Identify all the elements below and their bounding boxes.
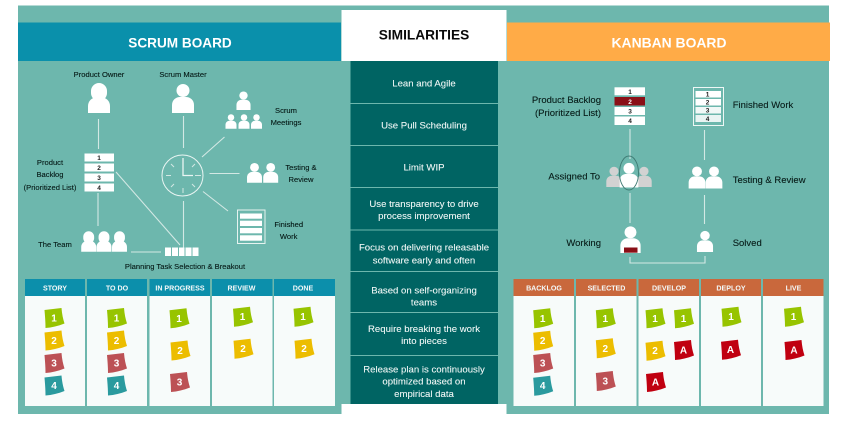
- column: selected: [576, 279, 636, 406]
- label: product backlog: (Prioritized List): [535, 108, 601, 119]
- column: review: 1: [240, 312, 246, 323]
- column: in progress: 2: [177, 346, 183, 357]
- label: finished work: Work: [280, 232, 298, 241]
- label: product owner: Product Owner: [74, 70, 125, 79]
- item: transparency: process improvement: [378, 211, 470, 222]
- column: backlog: 2: [540, 336, 546, 347]
- label: scrum master: Scrum Master: [159, 70, 207, 79]
- column: story: 4: [51, 381, 57, 392]
- label: assigned to: Assigned To: [548, 172, 600, 182]
- icon: planning tasks: [165, 248, 198, 256]
- label: scrum meetings: Scrum: [275, 106, 297, 115]
- item: lean and agile: Lean and Agile: [392, 78, 456, 90]
- column: backlog: BACKLOG: [526, 284, 562, 292]
- heading: kanban board: [507, 22, 830, 61]
- item: transparency: Use transparency to drive: [369, 199, 479, 210]
- heading: scrum board: SCRUM BOARD: [128, 36, 232, 50]
- icon: clock: [162, 155, 203, 196]
- label: solved: Solved: [733, 238, 762, 249]
- item: releasable software: Focus on delivering releasable: [359, 242, 489, 254]
- item: self-organizing teams: teams: [411, 298, 437, 308]
- item: breaking work: into pieces: [401, 336, 447, 347]
- column: deploy: A: [727, 345, 734, 356]
- label: working: Working: [566, 238, 601, 249]
- icon: product backlog list: 4: [97, 185, 101, 192]
- label: the team: The Team: [38, 240, 72, 249]
- column: to do: TO DO: [106, 284, 129, 292]
- column: backlog: 3: [540, 358, 546, 370]
- column: deploy: DEPLOY: [716, 284, 746, 292]
- icon: product backlog list: [84, 154, 114, 192]
- icon: scrum meetings: [226, 91, 262, 129]
- column: story: 1: [51, 314, 57, 324]
- icon: testing and review: [247, 163, 278, 183]
- column: develop: 2: [652, 346, 658, 357]
- label: testing and review: Testing &: [285, 163, 317, 172]
- column: done: 2: [301, 344, 307, 355]
- kanban connector lines: [630, 129, 705, 263]
- icon: solved: [697, 231, 713, 252]
- item: self-organizing teams: Based on self-organizing: [371, 286, 477, 296]
- column: develop: A: [652, 378, 659, 388]
- icon: product backlog list: 1: [97, 155, 101, 162]
- column: develop: [638, 279, 699, 406]
- heading: similarities: [342, 10, 506, 61]
- column: selected: SELECTED: [588, 284, 625, 292]
- icon: kanban backlog list: 4: [628, 118, 632, 125]
- icon: working: [620, 226, 641, 253]
- column: in progress: [150, 279, 210, 406]
- label: planning task selection: Planning Task Selection & Breakout: [125, 262, 246, 271]
- icon: kanban backlog list: 2: [628, 99, 632, 106]
- icon: product backlog list: 2: [97, 165, 101, 172]
- icon: testing and review: [689, 166, 722, 188]
- column: review: REVIEW: [228, 284, 256, 292]
- icon: the team: [81, 231, 127, 252]
- icon: kanban finished work: 2: [706, 100, 710, 106]
- board: scrum columns: [25, 279, 335, 406]
- white footer tab: [342, 404, 506, 414]
- column: live: LIVE: [786, 284, 802, 292]
- icon: product backlog list: 3: [97, 175, 101, 182]
- column: selected: 1: [603, 314, 609, 325]
- heading: similarities: SIMILARITIES: [379, 28, 469, 42]
- icon: kanban finished work: 4: [706, 116, 710, 123]
- column: develop: 1: [681, 314, 687, 325]
- heading: scrum board: [18, 22, 341, 61]
- item: pull scheduling: Use Pull Scheduling: [381, 120, 467, 132]
- column: develop: DEVELOP: [652, 284, 686, 292]
- column: to do: [87, 279, 147, 406]
- column: done: 1: [300, 312, 306, 323]
- scrum connector lines: [98, 116, 240, 252]
- icon: kanban backlog list: 1: [628, 89, 632, 96]
- column: backlog: [514, 279, 574, 406]
- item: release plan: Release plan is continuously: [363, 364, 485, 376]
- column: story: STORY: [43, 284, 67, 292]
- column: story: [25, 279, 85, 406]
- panel: kanban board: [507, 22, 830, 406]
- column: in progress: IN PROGRESS: [155, 284, 205, 292]
- label: product backlog: Product: [37, 158, 63, 167]
- column: develop: A: [680, 346, 687, 356]
- column: to do: 1: [114, 314, 120, 324]
- icon: kanban finished work: 3: [706, 108, 710, 114]
- label: testing and review: Review: [289, 175, 314, 184]
- column: backlog: 1: [540, 314, 546, 325]
- column: in progress: 1: [176, 314, 182, 325]
- column: story: 2: [51, 336, 57, 347]
- label: product backlog: Product Backlog: [532, 95, 601, 106]
- icon: kanban finished work: 1: [706, 92, 710, 98]
- column: story: 3: [51, 358, 57, 370]
- label: finished work: Finished: [274, 220, 303, 229]
- panel: similarities: [342, 10, 506, 414]
- column: develop: 1: [652, 314, 658, 325]
- column: done: DONE: [293, 284, 314, 292]
- item: release plan: optimized based on: [382, 376, 466, 388]
- board: kanban columns: [514, 279, 824, 406]
- label: testing and review: Testing & Review: [733, 175, 806, 186]
- column: done: [274, 279, 335, 406]
- label: scrum meetings: Meetings: [271, 118, 302, 127]
- column: to do: 3: [114, 358, 120, 370]
- column: deploy: [701, 279, 761, 406]
- icon: kanban backlog list: 3: [628, 108, 632, 116]
- label: product backlog: Backlog: [36, 170, 64, 179]
- column: to do: 2: [114, 336, 120, 347]
- icon: product owner: [88, 83, 110, 113]
- icon: assigned to: [606, 156, 652, 190]
- column: selected: 2: [603, 344, 609, 355]
- column: deploy: 1: [728, 312, 734, 323]
- column: in progress: 3: [177, 378, 183, 388]
- column: review: 2: [240, 344, 246, 355]
- panel: scrum board: [18, 22, 341, 406]
- column: live: [763, 279, 824, 406]
- column: to do: 4: [114, 381, 120, 392]
- item: release plan: empirical data: [394, 389, 455, 400]
- icon: finished work: [238, 210, 265, 244]
- item: breaking work: Require breaking the work: [368, 324, 480, 335]
- label: product backlog: (Prioritized List): [24, 183, 77, 192]
- column: selected: 3: [603, 376, 609, 388]
- column: live: A: [790, 346, 798, 356]
- column: live: 1: [791, 312, 797, 323]
- similarities list: [350, 61, 498, 404]
- column: backlog: 4: [540, 381, 546, 392]
- item: limit wip: Limit WIP: [403, 162, 445, 174]
- icon: kanban backlog list: [614, 87, 645, 125]
- heading: kanban board: KANBAN BOARD: [612, 34, 726, 50]
- label: finished work: Finished Work: [733, 100, 793, 111]
- item: releasable software: software early and often: [373, 256, 475, 266]
- icon: scrum master: [172, 84, 194, 113]
- column: review: [212, 279, 272, 406]
- icon: kanban finished work: [694, 88, 724, 126]
